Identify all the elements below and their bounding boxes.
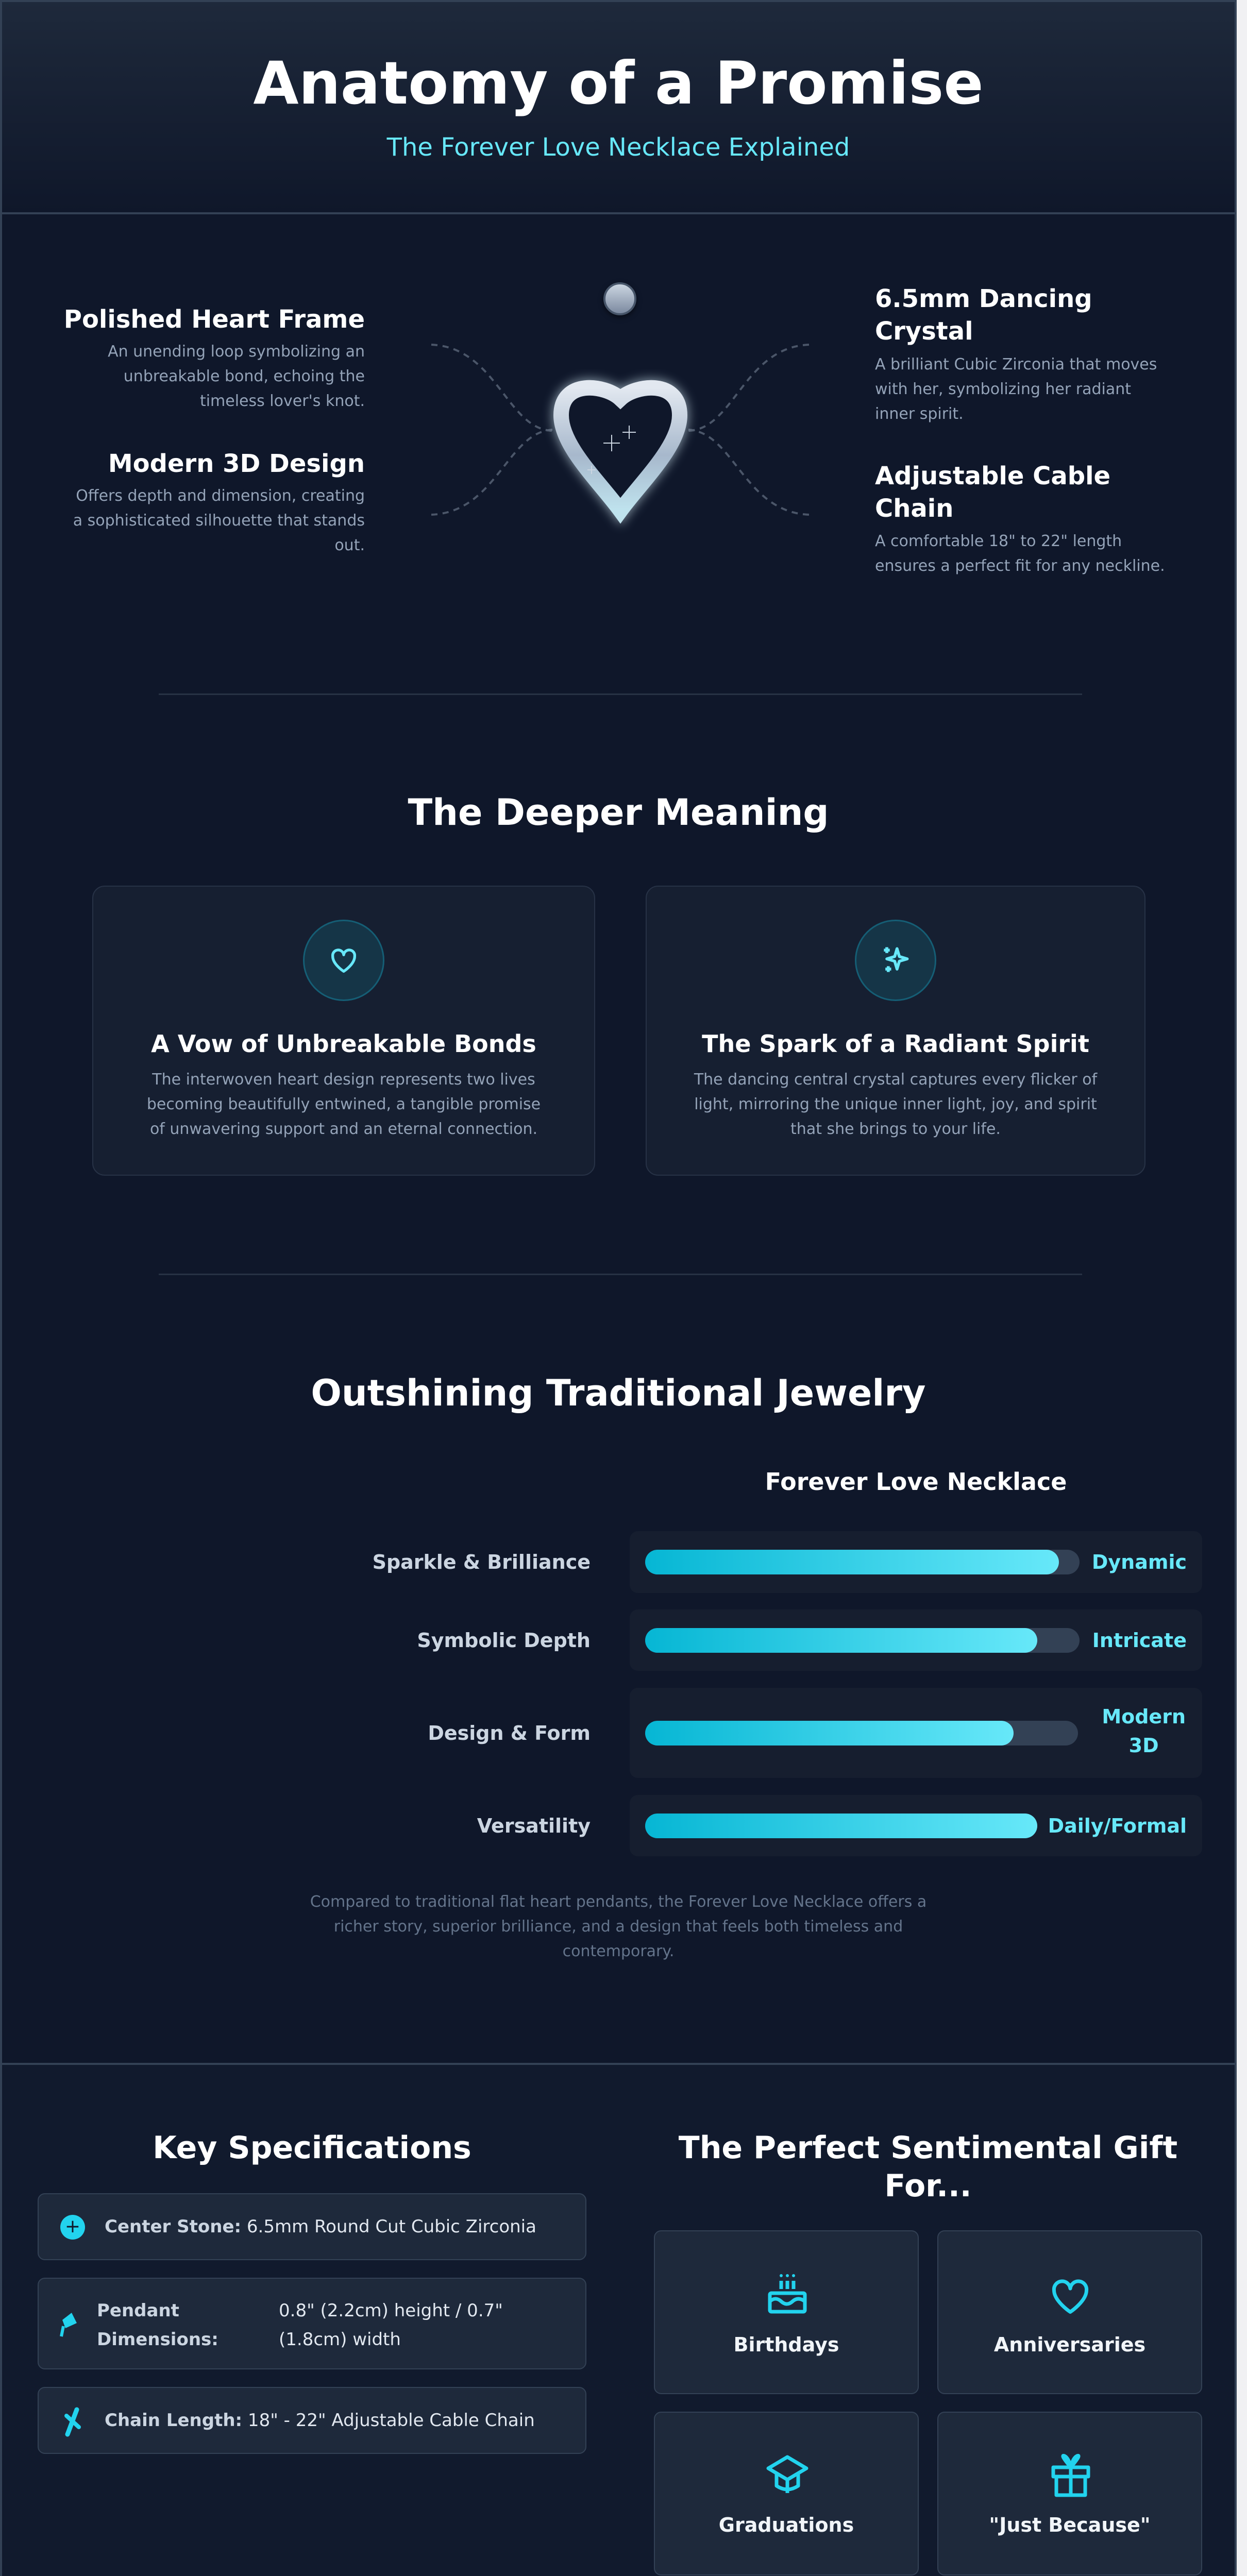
text block: Modern 3D Design: Modern 3D Design xyxy=(108,449,365,478)
text block: Modern 3D Design: Offers depth and dimension, creating xyxy=(76,487,365,505)
panel: anatomy diagram xyxy=(64,282,1165,575)
icon: plus circle xyxy=(60,2215,85,2240)
text block: 6.5mm Dancing Crystal: Crystal xyxy=(875,317,973,346)
card body: The interwoven heart design represents two lives xyxy=(152,1071,535,1089)
spec: center stone xyxy=(38,2193,586,2260)
spec: center stone: Center Stone: 6.5mm Round Cut Cubic Zirconia xyxy=(105,2216,536,2237)
chart column header: Forever Love Necklace xyxy=(765,1468,1067,1496)
footnote: richer story, superior brilliance, and a design that feels both timeless and xyxy=(334,1918,903,1936)
heading: The Perfect Sentimental Gift For...: For... xyxy=(884,2168,972,2204)
text block: Modern 3D Design: a sophisticated silhouette that stands xyxy=(73,512,365,530)
text block: Polished Heart Frame: An unending loop symbolizing an xyxy=(108,343,365,361)
text block: 6.5mm Dancing Crystal: A brilliant Cubic Zirconia that moves xyxy=(875,355,1157,374)
text block: Polished Heart Frame xyxy=(64,305,365,410)
panel: comparison bar chart xyxy=(310,1468,1187,1960)
text block: Modern 3D Design xyxy=(73,449,365,554)
panel: specs and gifts section xyxy=(2,2063,1235,2576)
text block: Polished Heart Frame: Polished Heart Frame xyxy=(64,305,365,334)
subtitle: The Forever Love Necklace Explained xyxy=(387,133,850,162)
icon: plus circle: + xyxy=(65,2216,80,2237)
connector lines xyxy=(431,344,809,516)
spec: pendant dimensions: 0.8" (2.2cm) height / 0.7" xyxy=(279,2300,503,2321)
heading: The Deeper Meaning: The Deeper Meaning xyxy=(408,791,829,834)
heading: Key Specifications: Key Specifications xyxy=(153,2130,471,2166)
row: Sparkle: Dynamic xyxy=(1092,1551,1187,1573)
title: Anatomy of a Promise xyxy=(253,49,984,117)
row: Symbolic Depth xyxy=(417,1628,1187,1653)
text block: 6.5mm Dancing Crystal xyxy=(875,284,1157,423)
gift: Anniversaries: Anniversaries xyxy=(994,2333,1145,2356)
spec: chain length xyxy=(38,2387,586,2454)
gift: Birthdays xyxy=(654,2230,919,2394)
icon: heart xyxy=(1052,2279,1088,2314)
spec: pendant dimensions: Dimensions: xyxy=(97,2329,218,2350)
icon: bail xyxy=(603,282,636,315)
icon: gift box xyxy=(1051,2454,1090,2497)
footnote xyxy=(310,1893,926,1960)
icon: sparkles xyxy=(855,920,936,1001)
card title: A Vow of Unbreakable Bonds xyxy=(151,1030,536,1058)
panel: unbreakable bonds card xyxy=(92,886,595,1176)
text block: Adjustable Cable Chain xyxy=(875,462,1165,575)
icon: cake xyxy=(768,2274,807,2313)
text block: 6.5mm Dancing Crystal: inner spirit. xyxy=(875,405,964,423)
card title: The Spark of a Radiant Spirit xyxy=(702,1030,1089,1058)
card body: The dancing central crystal captures every flicker of xyxy=(694,1071,1097,1089)
gift: Birthdays: Birthdays xyxy=(733,2333,839,2356)
text block: Polished Heart Frame: timeless lover's knot. xyxy=(200,392,365,410)
footnote: contemporary. xyxy=(563,1942,674,1960)
gift: Graduations: Graduations xyxy=(719,2514,854,2536)
card body: light, mirroring the unique inner light, joy, and spirit xyxy=(694,1095,1097,1113)
heading: The Perfect Sentimental Gift For... xyxy=(679,2130,1177,2204)
row: Design & Form: 3D xyxy=(1129,1734,1159,1757)
icon: heart pendant xyxy=(545,372,696,529)
card body: that she brings to your life. xyxy=(790,1120,1001,1138)
row: Design & Form xyxy=(428,1705,1186,1757)
text block: 6.5mm Dancing Crystal: with her, symbolizing her radiant xyxy=(875,380,1131,398)
header xyxy=(2,2,1235,214)
text block: Adjustable Cable Chain: Chain xyxy=(875,494,953,523)
row: Symbolic Depth: Symbolic Depth xyxy=(417,1629,591,1652)
row: Design & Form: Design & Form xyxy=(428,1722,591,1744)
icon: pendant xyxy=(60,2313,77,2337)
text block: Polished Heart Frame: unbreakable bond, echoing the xyxy=(124,367,365,385)
panel: radiant spirit card xyxy=(646,886,1145,1176)
text block: Modern 3D Design: out. xyxy=(334,536,365,554)
heading: The Perfect Sentimental Gift For...: The Perfect Sentimental Gift xyxy=(679,2130,1177,2166)
row: Versatility xyxy=(477,1814,1187,1838)
footnote: Compared to traditional flat heart pendants, the Forever Love Necklace offers a xyxy=(310,1893,926,1911)
gift: Graduations xyxy=(654,2412,919,2575)
icon: chain link xyxy=(64,2407,81,2437)
card body xyxy=(147,1071,541,1138)
spec: chain length: Chain Length: 18" - 22" Adjustable Cable Chain xyxy=(105,2410,535,2431)
gift: Just Because: "Just Because" xyxy=(989,2514,1151,2536)
spec: pendant dimensions: (1.8cm) width xyxy=(279,2329,401,2350)
row: Versatility: Versatility xyxy=(477,1815,591,1837)
row: Sparkle xyxy=(373,1550,1187,1574)
icon: heart xyxy=(303,920,384,1001)
text block: 6.5mm Dancing Crystal: 6.5mm Dancing xyxy=(875,284,1092,313)
row: Symbolic Depth: Intricate xyxy=(1092,1629,1187,1652)
spec: pendant dimensions: Pendant xyxy=(97,2300,179,2321)
card body: becoming beautifully entwined, a tangible promise xyxy=(147,1095,541,1113)
text block: Adjustable Cable Chain: ensures a perfect fit for any neckline. xyxy=(875,557,1165,575)
row: Versatility: Daily/Formal xyxy=(1048,1815,1187,1837)
gift: Anniversaries xyxy=(937,2230,1202,2394)
card body xyxy=(694,1071,1098,1138)
card body: of unwavering support and an eternal connection. xyxy=(150,1120,537,1138)
row: Design & Form: Modern xyxy=(1102,1705,1186,1728)
row: Sparkle: Sparkle & Brilliance xyxy=(373,1551,591,1573)
spec: pendant dimensions xyxy=(38,2278,586,2369)
heading: Outshining Traditional Jewelry: Outshining Traditional Jewelry xyxy=(311,1372,926,1414)
gift: Just Because xyxy=(937,2412,1202,2575)
text block: Adjustable Cable Chain: A comfortable 18" to 22" length xyxy=(875,532,1122,550)
icon: graduation cap xyxy=(767,2455,808,2493)
text block: Adjustable Cable Chain: Adjustable Cable xyxy=(875,462,1110,490)
